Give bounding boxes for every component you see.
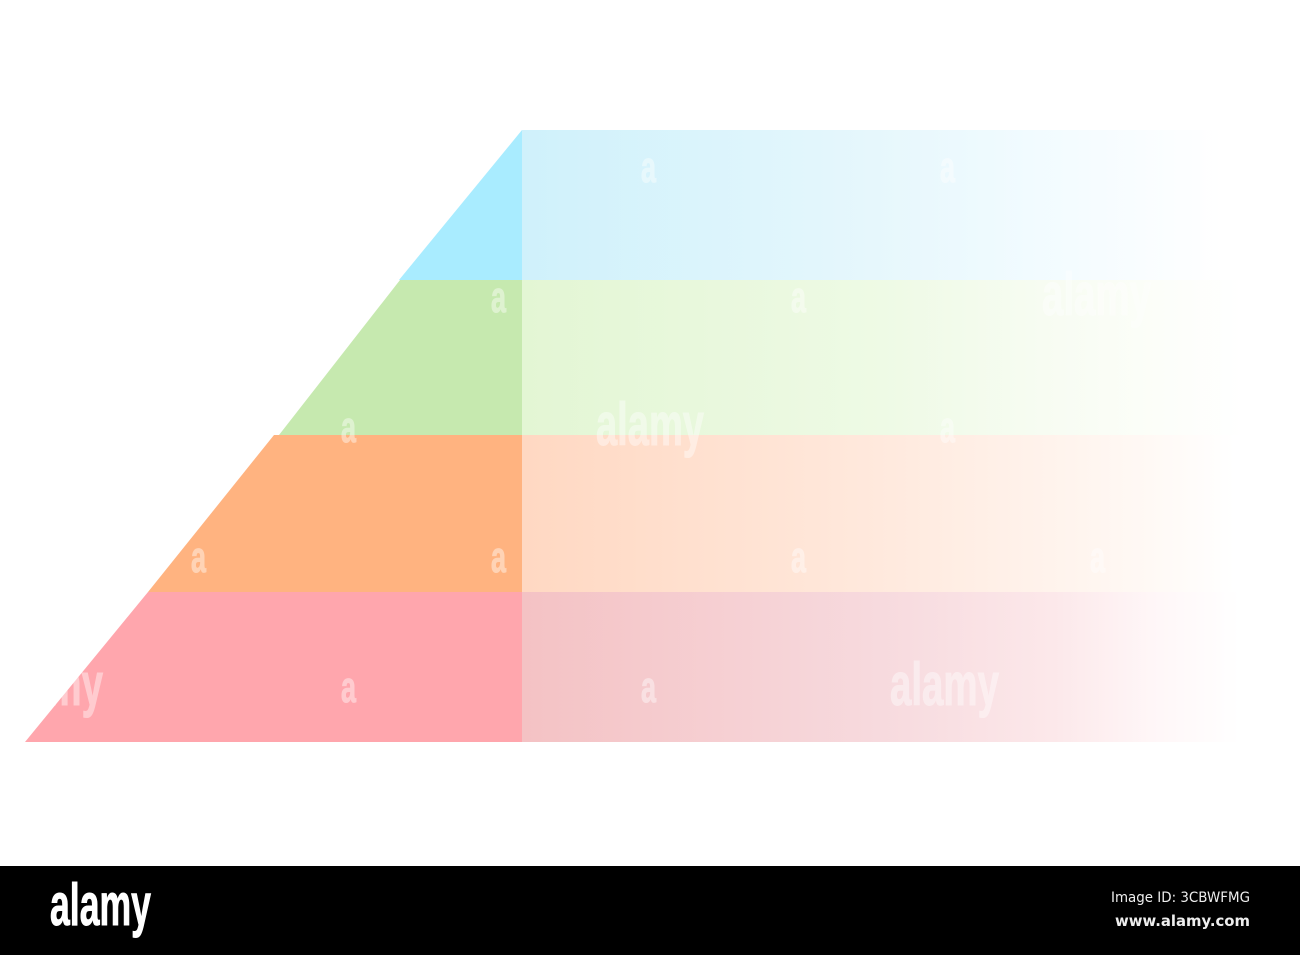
footer bar	[0, 866, 1300, 955]
stock watermarks: a	[1090, 533, 1105, 582]
tier 3 orange: sloped segment	[148, 435, 522, 592]
stock watermarks: alamy	[596, 391, 704, 458]
stock watermarks	[0, 143, 1151, 718]
stock watermarks: a	[791, 273, 806, 322]
tier 1 blue: fading bar	[522, 130, 1225, 280]
stock watermarks: a	[491, 533, 506, 582]
tier 4 pink: sloped segment	[25, 592, 522, 742]
image id: Image ID: 3CBWFMG	[1111, 890, 1250, 906]
stock watermarks: a	[791, 533, 806, 582]
stock watermarks: a	[940, 143, 955, 192]
stock watermarks: a	[641, 143, 656, 192]
stock watermarks: a	[341, 403, 356, 452]
footer logo: alamy: alamy	[50, 872, 151, 938]
tier 3 orange: fading bar	[522, 435, 1235, 592]
tier 2 green: fading bar	[522, 280, 1245, 435]
stock watermarks: a	[341, 663, 356, 712]
tier 1 blue: sloped segment	[399, 130, 522, 280]
stock watermarks: a	[191, 533, 206, 582]
tier 4 pink: fading bar	[522, 592, 1240, 742]
stock watermarks: alamy	[1042, 261, 1151, 328]
website url: www.alamy.com	[1115, 912, 1250, 930]
stock watermarks: a	[940, 403, 955, 452]
stock watermarks: alamy	[890, 651, 999, 718]
tier 2 green: sloped segment	[279, 280, 522, 435]
stock watermarks: a	[641, 663, 656, 712]
pyramid diagram	[25, 130, 1245, 742]
stock watermarks: a	[491, 273, 506, 322]
